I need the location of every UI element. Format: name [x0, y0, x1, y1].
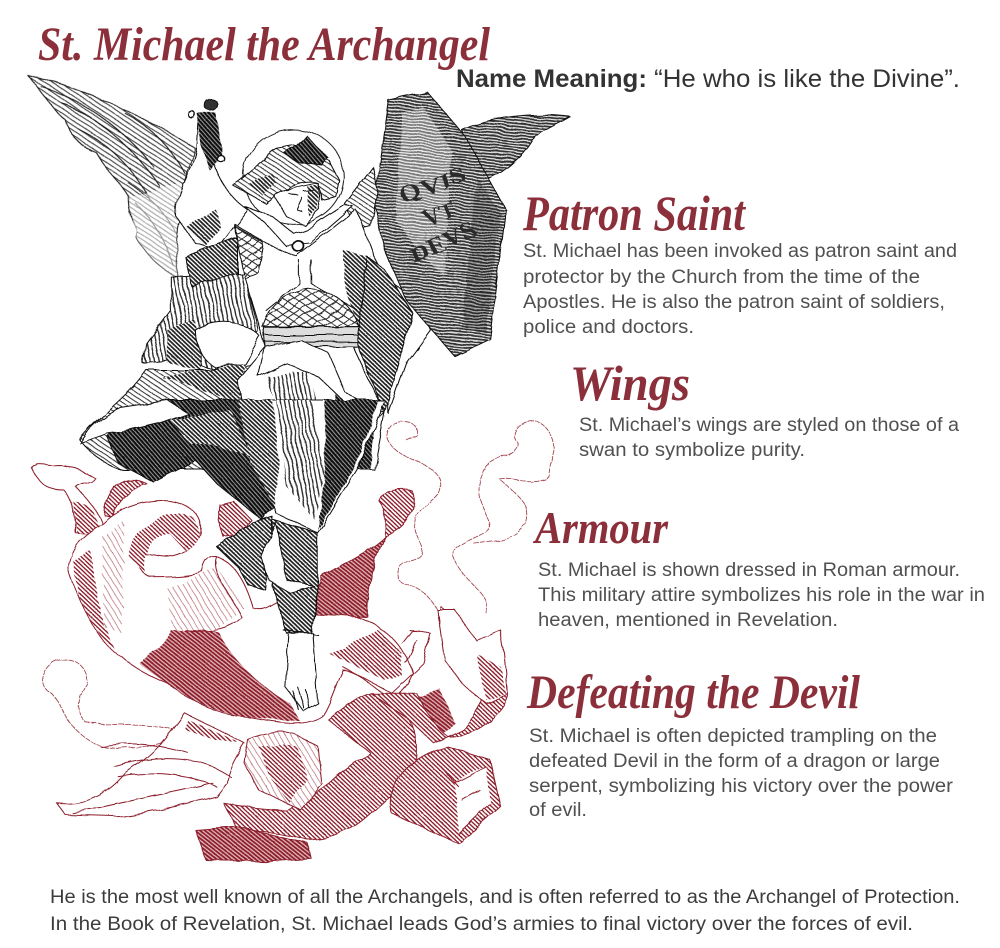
- dragon left arm: [32, 464, 146, 533]
- name meaning: Name Meaning: “He who is like the Divine”.: [456, 65, 960, 93]
- illustration: red dragon devil: [32, 420, 554, 862]
- right arm cloak: [357, 257, 413, 413]
- shield: QVIS: [395, 162, 470, 208]
- dragon necks: [223, 607, 508, 840]
- bare foot: [285, 633, 318, 712]
- text: armour: heaven, mentioned in Revelation.: [538, 610, 838, 631]
- cloak skirt: [80, 363, 266, 470]
- footer text: In the Book of Revelation, St. Michael leads God’s armies to final victory over the forces of evil.: [50, 914, 913, 935]
- text: patron saint: St. Michael has been invoked as patron saint and: [523, 241, 957, 262]
- heading: defeating the devil: Defeating the Devil: [526, 666, 861, 719]
- left wing: [26, 74, 195, 278]
- text: armour: This military attire symbolizes his role in the war in: [538, 585, 985, 606]
- text: defeating the devil: St. Michael is often depicted trampling on the: [529, 726, 937, 747]
- dragon body: [68, 500, 413, 723]
- text: defeating the devil: serpent, symbolizing his victory over the power: [529, 776, 954, 797]
- text: patron saint: police and doctors.: [523, 317, 694, 338]
- shield: VT: [419, 197, 460, 231]
- shield: DEVS: [406, 217, 480, 268]
- right wing: [462, 115, 570, 178]
- panel: patron saint: [522, 185, 957, 338]
- panel: defeating the devil: [526, 666, 954, 821]
- dragon wing: [57, 713, 245, 817]
- leg drape: [237, 340, 385, 470]
- text: patron saint: [523, 241, 957, 338]
- smoke wisps: [43, 420, 554, 748]
- text: defeating the devil: [529, 726, 954, 821]
- footer text: He is the most well known of all the Archangels, and is often referred to as the Archangel of Protection.: [50, 887, 960, 908]
- text: armour: [538, 560, 985, 631]
- panel: armour: [532, 502, 985, 631]
- raised arm and sword: [176, 99, 248, 250]
- heading: patron saint: Patron Saint: [522, 185, 747, 241]
- halo: [243, 129, 344, 224]
- title: St. Michael the Archangel: [38, 18, 491, 71]
- right forearm to shield: [344, 167, 378, 230]
- lower leg greave: [262, 520, 318, 635]
- text: patron saint: Apostles. He is also the patron saint of soldiers,: [523, 292, 945, 313]
- text: wings: [579, 415, 959, 461]
- panel: wings: [570, 355, 959, 461]
- text: wings: swan to symbolize purity.: [579, 440, 805, 461]
- head and hair: [232, 135, 339, 225]
- left foot and shin: [216, 517, 273, 590]
- lower figure: [80, 400, 385, 712]
- text: armour: St. Michael is shown dressed in Roman armour.: [538, 560, 960, 581]
- illustration: St. Michael engraving: [26, 74, 570, 712]
- dark cape underside: [80, 400, 280, 520]
- text: defeating the devil: defeated Devil in the form of a dragon or large: [529, 751, 940, 772]
- armour torso: [234, 205, 385, 347]
- lower feathers behind the armour: [385, 277, 430, 413]
- text: wings: St. Michael’s wings are styled on those of a: [579, 415, 959, 436]
- footer text: [50, 887, 960, 935]
- dragon right leg and claw: [218, 489, 430, 693]
- shield: [374, 92, 506, 357]
- text: defeating the devil: of evil.: [529, 800, 587, 821]
- heading: wings: Wings: [570, 355, 690, 411]
- upper figure: [26, 74, 570, 470]
- left sleeve: [143, 237, 260, 370]
- leg drape lower: [237, 400, 385, 533]
- dragon heads: [195, 610, 508, 862]
- text: patron saint: protector by the Church from the time of the: [523, 267, 920, 288]
- heading: armour: Armour: [532, 502, 669, 553]
